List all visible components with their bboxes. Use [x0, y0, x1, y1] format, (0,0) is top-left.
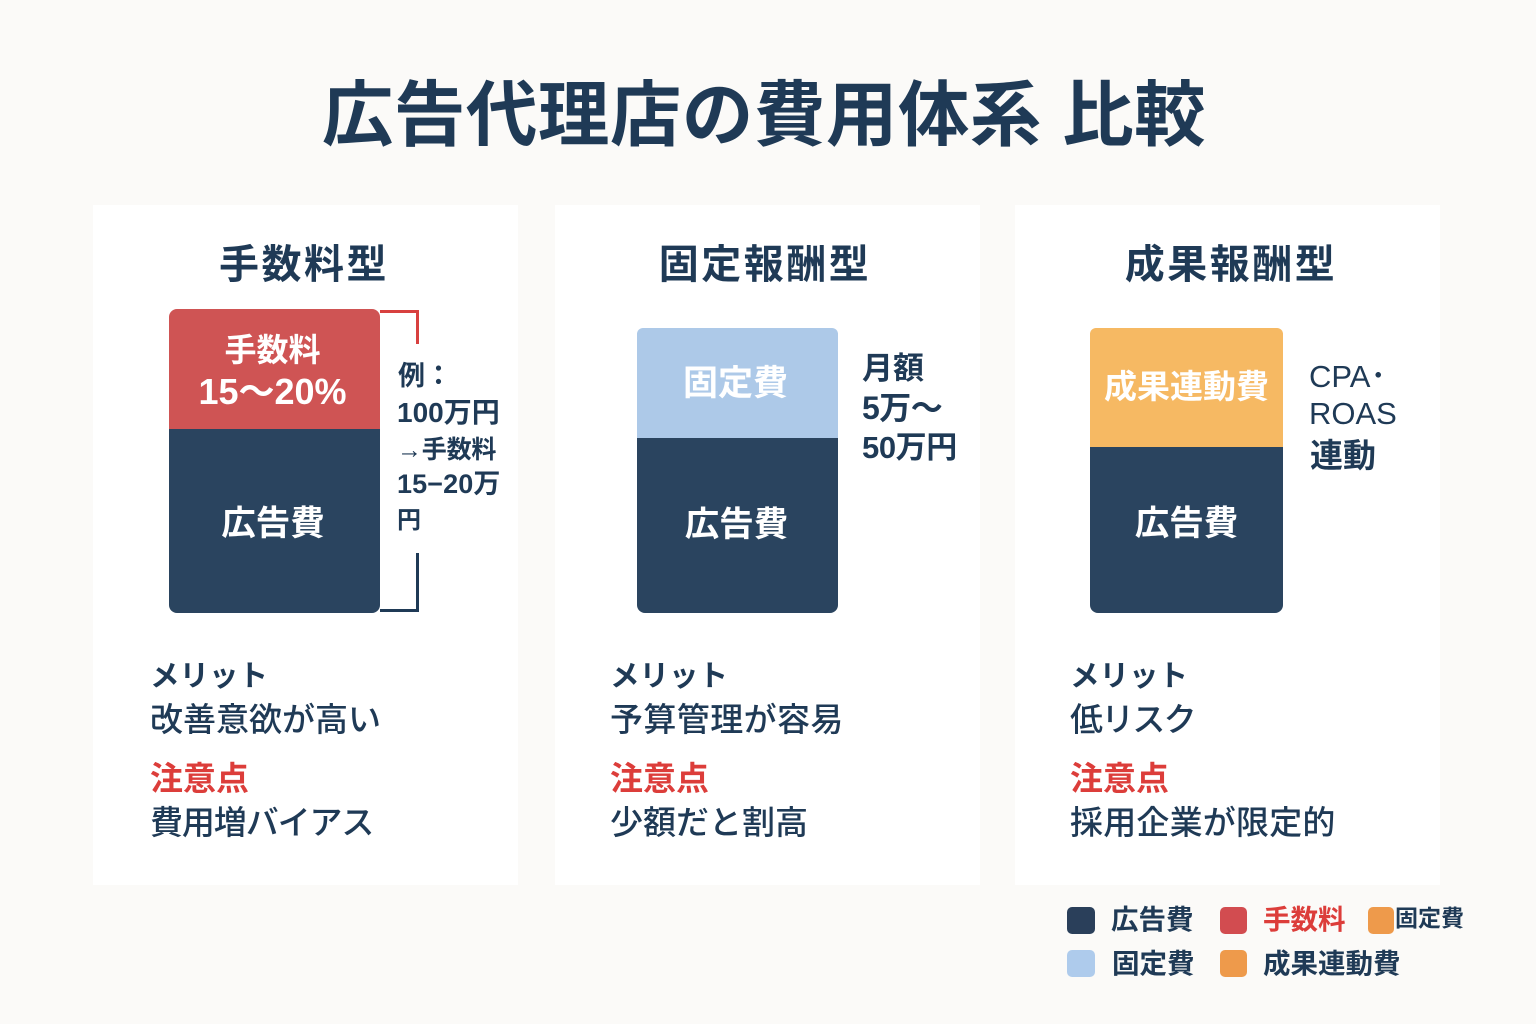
stacked bar: fixed fee type	[637, 328, 838, 613]
legend item: fixed fee blue	[1067, 948, 1194, 979]
legend item: commission: 手数料	[1263, 904, 1346, 935]
bar segment: ad spend: 広告費	[685, 506, 788, 544]
label: merit: メリット	[1070, 660, 1188, 693]
text: merit body: 改善意欲が高い	[150, 701, 381, 738]
text: caution body: 費用増バイアス	[150, 804, 373, 841]
note: monthly fee: 50万円	[862, 430, 957, 465]
bracket: commission range bottom	[380, 553, 419, 612]
note: monthly fee	[862, 351, 957, 465]
label: caution: 注意点	[150, 760, 249, 797]
stacked bar: performance type	[1090, 328, 1283, 613]
label: merit: メリット	[150, 660, 268, 693]
heading: commission type: 手数料型	[219, 243, 389, 287]
note: CPA ROAS: CPA･	[1309, 359, 1386, 394]
example text: commission: 100万円	[397, 397, 500, 428]
bar segment: commission: 15～20%	[198, 371, 347, 412]
legend	[1067, 904, 1464, 979]
note: monthly fee: 5万～	[862, 390, 942, 426]
legend item: commission	[1220, 904, 1346, 935]
text: caution body: 採用企業が限定的	[1070, 804, 1336, 841]
legend item: fixed fee orange: 固定費	[1395, 905, 1464, 931]
heading: performance type: 成果報酬型	[1125, 243, 1337, 287]
note: monthly fee: 月額	[862, 351, 924, 386]
legend item: fixed fee blue: 固定費	[1112, 948, 1194, 979]
bar segment: commission: 手数料	[224, 332, 320, 368]
bar segment: fixed fee	[637, 328, 838, 438]
bar segment: performance fee: 成果連動費	[1104, 368, 1269, 404]
legend item: performance fee: 成果連動費	[1263, 948, 1400, 979]
text: merit body: 予算管理が容易	[610, 701, 844, 738]
bar segment: ad spend	[169, 429, 380, 613]
bar segment: performance fee	[1090, 328, 1283, 448]
panel: fixed fee type	[555, 205, 980, 885]
bar segment: commission	[169, 309, 380, 429]
bar segment: ad spend	[1090, 447, 1283, 613]
label: merit: メリット	[610, 660, 728, 693]
stacked bar: commission type	[169, 309, 380, 613]
title: 広告代理店の費用体系 比較	[322, 76, 1206, 156]
label: caution: 注意点	[610, 760, 709, 797]
example text: commission: 15−20万	[397, 469, 500, 499]
text: performance pros and cons	[1070, 660, 1336, 841]
bar segment: ad spend: 広告費	[221, 505, 325, 543]
note: CPA ROAS	[1309, 359, 1397, 474]
bar segment: fixed fee: 固定費	[683, 364, 788, 402]
legend item: ad spend	[1067, 904, 1194, 935]
example text: commission: 例：	[398, 361, 452, 391]
text: caution body: 少額だと割高	[610, 804, 808, 841]
example text: commission: →手数料	[397, 436, 496, 464]
example text: commission	[397, 361, 500, 534]
legend item: fixed fee orange	[1368, 905, 1464, 934]
example text: commission: 円	[397, 507, 421, 534]
bar segment: ad spend: 広告費	[1135, 505, 1238, 543]
bracket: commission range top	[380, 310, 419, 344]
text: merit body: 低リスク	[1070, 701, 1195, 738]
bar segment: ad spend	[637, 438, 838, 613]
note: CPA ROAS: ROAS	[1309, 396, 1397, 431]
label: caution: 注意点	[1070, 760, 1169, 797]
text: commission pros and cons	[150, 660, 381, 841]
heading: fixed fee type: 固定報酬型	[659, 243, 871, 287]
panel: performance type	[1015, 205, 1440, 885]
text: fixed fee pros and cons	[610, 660, 844, 841]
panel: commission type	[93, 205, 518, 885]
note: CPA ROAS: 連動	[1310, 437, 1376, 474]
legend item: ad spend: 広告費	[1111, 904, 1194, 935]
